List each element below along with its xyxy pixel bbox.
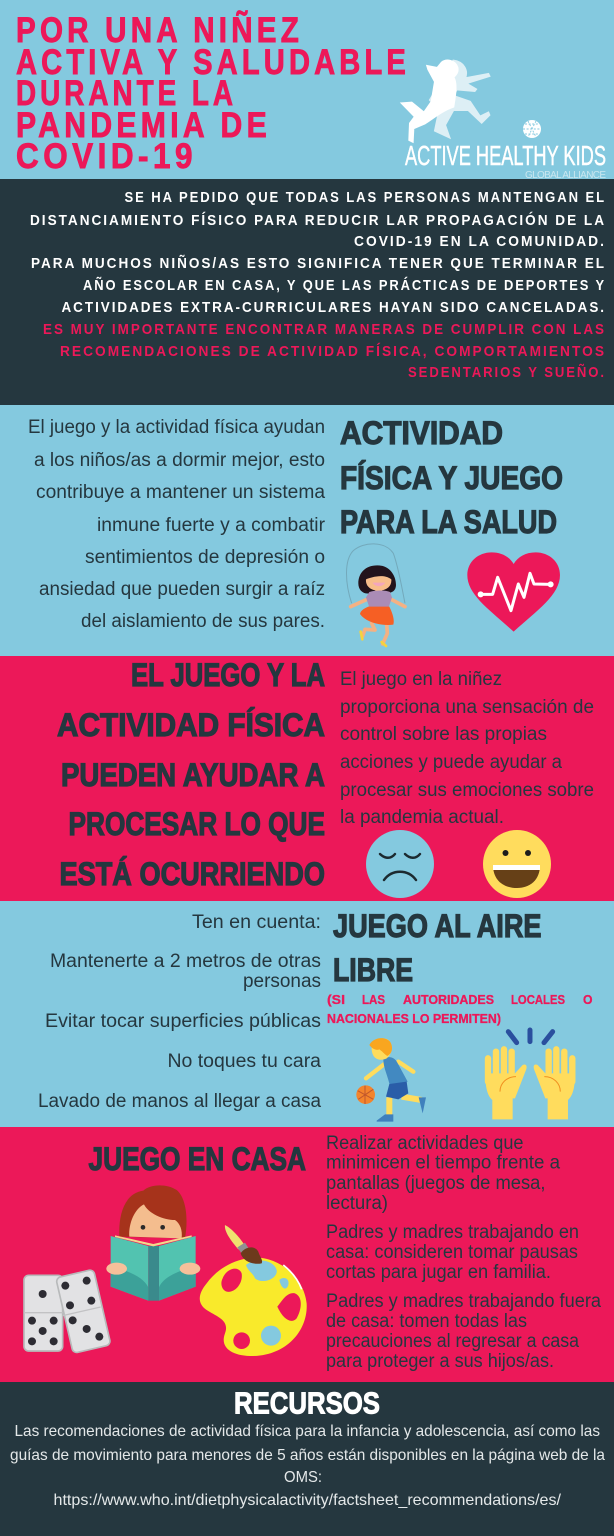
panel: processing emotions: [0, 656, 614, 901]
icon: sad face: [366, 830, 434, 898]
heading: [340, 415, 563, 540]
panel: play at home: [0, 1127, 614, 1382]
body text: para proteger a sus hijos/as.: [326, 1351, 554, 1372]
body text: [28, 417, 326, 632]
note in pink: LAS: [362, 992, 385, 1007]
safety list: Evitar tocar superficies públicas: [45, 1011, 321, 1032]
title: COVID-19: [16, 137, 197, 176]
panel: outdoor play: [0, 901, 614, 1127]
body text: del aislamiento de sus pares.: [81, 611, 325, 632]
heading: ESTÁ OCURRIENDO: [60, 856, 325, 892]
body text: a los niños/as a dormir mejor, esto: [34, 450, 325, 471]
body text: control sobre las propias: [340, 724, 547, 745]
heading: EL JUEGO Y LA: [131, 657, 325, 693]
safety list: personas: [243, 971, 321, 992]
icon: running children silhouette: [402, 61, 489, 142]
body text: precauciones al regresar a casa: [326, 1331, 579, 1352]
body text: sentimientos de depresión o: [85, 547, 325, 568]
panel: introduction: [0, 179, 614, 405]
body text: Padres y madres trabajando fuera: [326, 1291, 601, 1312]
safety list: Mantenerte a 2 metros de otras: [50, 951, 321, 972]
body text: El juego en la niñez: [340, 669, 502, 690]
intro text white: [30, 189, 606, 316]
heading: RECURSOS: [234, 1386, 380, 1420]
logo: Active Healthy Kids: [402, 61, 606, 181]
icon: globe: [523, 120, 541, 138]
body text: lectura): [326, 1193, 388, 1214]
title: [16, 11, 410, 176]
heading: ACTIVIDAD FÍSICA: [57, 707, 325, 743]
heading: PROCESAR LO QUE: [68, 806, 325, 842]
body text: [340, 669, 594, 828]
title: ACTIVA Y SALUDABLE: [16, 43, 410, 82]
heading: JUEGO EN CASA: [88, 1141, 306, 1177]
icon: happy face: [483, 830, 551, 898]
body text: El juego y la actividad física ayudan: [28, 417, 325, 438]
body text: inmune fuerte y a combatir: [97, 515, 326, 536]
heading: ACTIVIDAD: [340, 415, 503, 451]
resources text: [10, 1423, 605, 1509]
resources text: https://www.who.int/dietphysicalactivity/factsheet_recommendations/es/: [54, 1492, 562, 1509]
body text: cortas para jugar en familia.: [326, 1262, 551, 1283]
note in pink: (SI: [327, 992, 345, 1007]
icon: child reading: [106, 1185, 200, 1301]
icon: girl jumping rope: [346, 544, 405, 646]
resources text: guías de movimiento para menores de 5 años están disponibles en la página web de la: [10, 1447, 605, 1464]
resources text: OMS:: [284, 1469, 322, 1486]
body text: contribuye a mantener un sistema: [36, 482, 325, 503]
note in pink: NACIONALES LO PERMITEN): [327, 1011, 501, 1026]
icon: boy with basketball: [356, 1038, 426, 1122]
note in pink: O: [583, 992, 592, 1007]
body text: casa: consideren tomar pausas: [326, 1242, 578, 1263]
body text: de casa: tomen todas las: [326, 1311, 527, 1332]
intro text pink: [43, 321, 606, 381]
note in pink: LOCALES: [511, 992, 565, 1007]
safety list: [38, 912, 321, 1112]
icon: raised hands: [485, 1030, 575, 1119]
heading: PARA LA SALUD: [340, 504, 557, 540]
safety list: Lavado de manos al llegar a casa: [38, 1091, 321, 1112]
title: POR UNA NIÑEZ: [16, 11, 303, 50]
body text: [326, 1133, 601, 1372]
logo tagline: GLOBAL ALLIANCE: [525, 170, 606, 181]
title: PANDEMIA DE: [16, 106, 271, 145]
icon: paint palette and brush: [200, 1225, 307, 1356]
heading: LIBRE: [333, 952, 413, 988]
note in pink: AUTORIDADES: [403, 992, 494, 1007]
heading: [57, 657, 325, 892]
icon: heart with pulse: [467, 552, 560, 632]
body text: Padres y madres trabajando en: [326, 1222, 579, 1243]
heading: [333, 908, 542, 988]
title: DURANTE LA: [16, 74, 237, 113]
body text: procesar sus emociones sobre: [340, 780, 594, 801]
icon: dominoes: [24, 1269, 111, 1353]
resources text: Las recomendaciones de actividad física para la infancia y adolescencia, así como las: [14, 1423, 600, 1440]
panel: resources: [0, 1382, 614, 1536]
body text: la pandemia actual.: [340, 807, 504, 828]
heading: JUEGO AL AIRE: [333, 908, 542, 944]
body text: Realizar actividades que: [326, 1133, 524, 1154]
heading: PUEDEN AYUDAR A: [61, 757, 325, 793]
panel: physical activity and health: [0, 405, 614, 656]
note in pink: [327, 992, 592, 1026]
panel: header: [0, 0, 614, 181]
safety list: No toques tu cara: [168, 1051, 321, 1072]
body text: pantallas (juegos de mesa,: [326, 1173, 546, 1194]
body text: minimicen el tiempo frente a: [326, 1152, 560, 1174]
body text: proporciona una sensación de: [340, 697, 594, 718]
heading: FÍSICA Y JUEGO: [340, 460, 563, 496]
body text: acciones y puede ayudar a: [340, 752, 562, 773]
body text: ansiedad que pueden surgir a raíz: [39, 579, 325, 600]
safety list: Ten en cuenta:: [192, 912, 321, 933]
